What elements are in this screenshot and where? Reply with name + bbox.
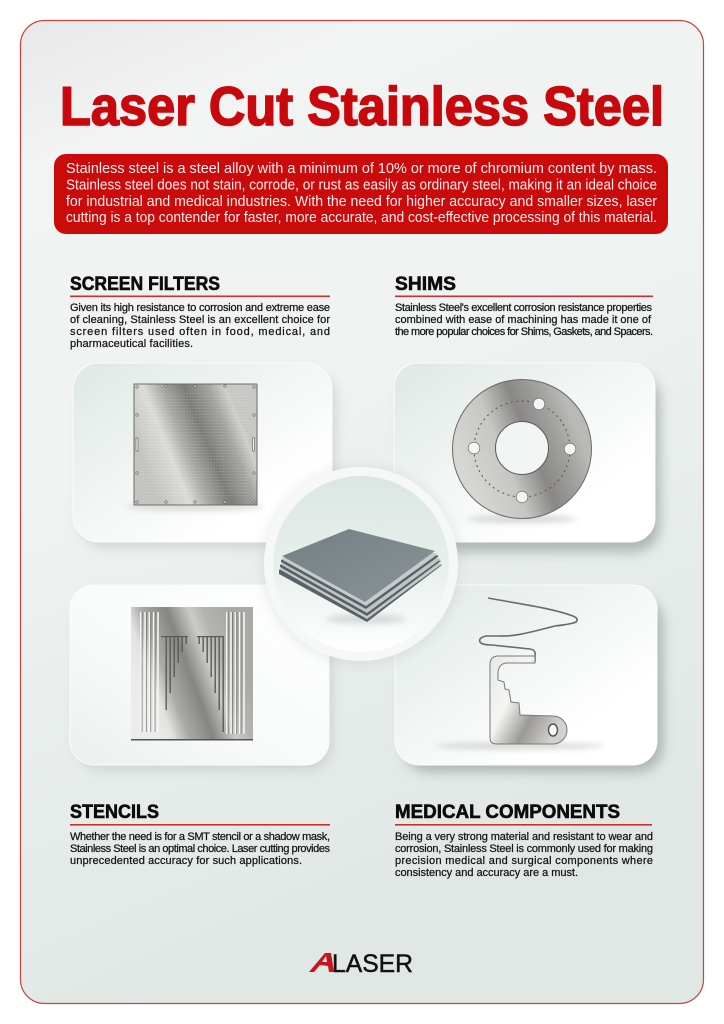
panel: stencil image <box>70 585 332 770</box>
logo: LASER <box>332 950 413 978</box>
section: shims text <box>395 274 653 338</box>
section: screen filters text: pharmaceutical facilities. <box>70 338 193 350</box>
section: medical components text <box>395 802 653 879</box>
panel: medical components image <box>395 585 663 772</box>
icon: round shim washer <box>452 380 592 518</box>
section: medical components text: consistency and accuracy are a must. <box>395 867 578 879</box>
section: screen filters text: SCREEN FILTERS <box>70 274 220 295</box>
icon: bent wire spring <box>480 598 577 662</box>
panel: screen filter image <box>73 363 336 548</box>
section: stencils text: STENCILS <box>70 802 159 823</box>
section: shims text: the more popular choices for Shims, Gaskets, and Spacers. <box>395 326 653 338</box>
section: shims text: combined with ease of machining has made it one of <box>395 314 652 326</box>
icon: stack of steel sheets <box>279 529 442 624</box>
icon: stainless medical part <box>490 656 567 744</box>
section: screen filters text: of cleaning, Stainless Steel is an excellent choice for <box>70 314 330 326</box>
section: medical components text: corrosion, Stainless Steel is commonly used for making <box>395 843 653 855</box>
section: medical components text: precision medical and surgical components where <box>395 855 653 867</box>
section: screen filters text: Given its high resistance to corrosion and extreme ease <box>70 302 330 314</box>
section: stencils text <box>70 802 330 867</box>
section: stencils text: unprecedented accuracy for such applications. <box>70 855 302 867</box>
section: medical components text: MEDICAL COMPONENTS <box>395 802 620 823</box>
section: shims text: SHIMS <box>395 274 456 295</box>
section: shims text: Stainless Steel's excellent corrosion resistance properties <box>395 302 652 314</box>
section: stencils text: Stainless Steel is an optimal choice. Laser cutting provides <box>70 843 330 855</box>
icon: red A mark <box>309 953 334 972</box>
panel: shims image <box>394 363 660 552</box>
intro callout: cutting is a top contender for faster, more accurate, and cost-effective processing of this material. <box>66 210 657 226</box>
intro callout: Stainless steel does not stain, corrode, or rust as easily as ordinary steel, making it an ideal choice <box>66 178 657 194</box>
intro callout <box>54 154 668 234</box>
icon: perforated metal screen filter <box>134 384 257 505</box>
section: screen filters text: screen filters used often in food, medical, and <box>70 326 330 338</box>
icon: stainless stencil sheet <box>131 607 253 740</box>
intro callout: Stainless steel is a steel alloy with a minimum of 10% or more of chromium content by mass. <box>66 161 657 177</box>
section: medical components text: Being a very strong material and resistant to wear and <box>395 831 653 843</box>
title: Laser Cut Stainless Steel <box>60 75 664 137</box>
intro callout: for industrial and medical industries. With the need for higher accuracy and smaller sizes, laser <box>66 194 657 210</box>
section: screen filters text <box>70 274 330 350</box>
center circle: stacked stainless sheets <box>262 466 460 664</box>
section: stencils text: Whether the need is for a SMT stencil or a shadow mask, <box>70 831 330 843</box>
